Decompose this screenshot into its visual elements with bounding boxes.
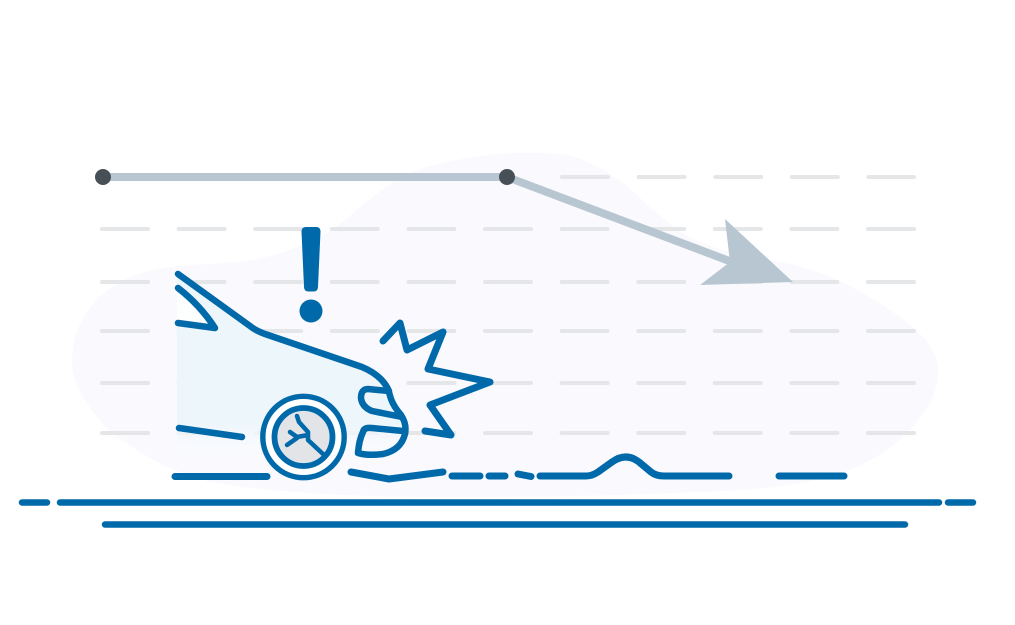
door sill xyxy=(179,428,242,437)
trend line with arrow xyxy=(95,169,793,285)
roof and hood outline xyxy=(178,274,406,455)
window outline xyxy=(178,288,215,328)
window xyxy=(177,288,215,328)
road surface xyxy=(175,457,844,479)
background blob xyxy=(72,153,938,497)
wheel xyxy=(263,396,344,478)
exclamation mark xyxy=(300,227,322,322)
crashed car xyxy=(177,274,406,480)
ground lines xyxy=(22,502,973,524)
impact burst xyxy=(383,323,490,435)
trend mid dot xyxy=(499,169,515,185)
car body fill xyxy=(177,274,406,480)
arrow head xyxy=(700,219,793,285)
headlight xyxy=(361,389,402,417)
trend start dot xyxy=(95,169,111,185)
dashed grid lines xyxy=(102,177,914,433)
